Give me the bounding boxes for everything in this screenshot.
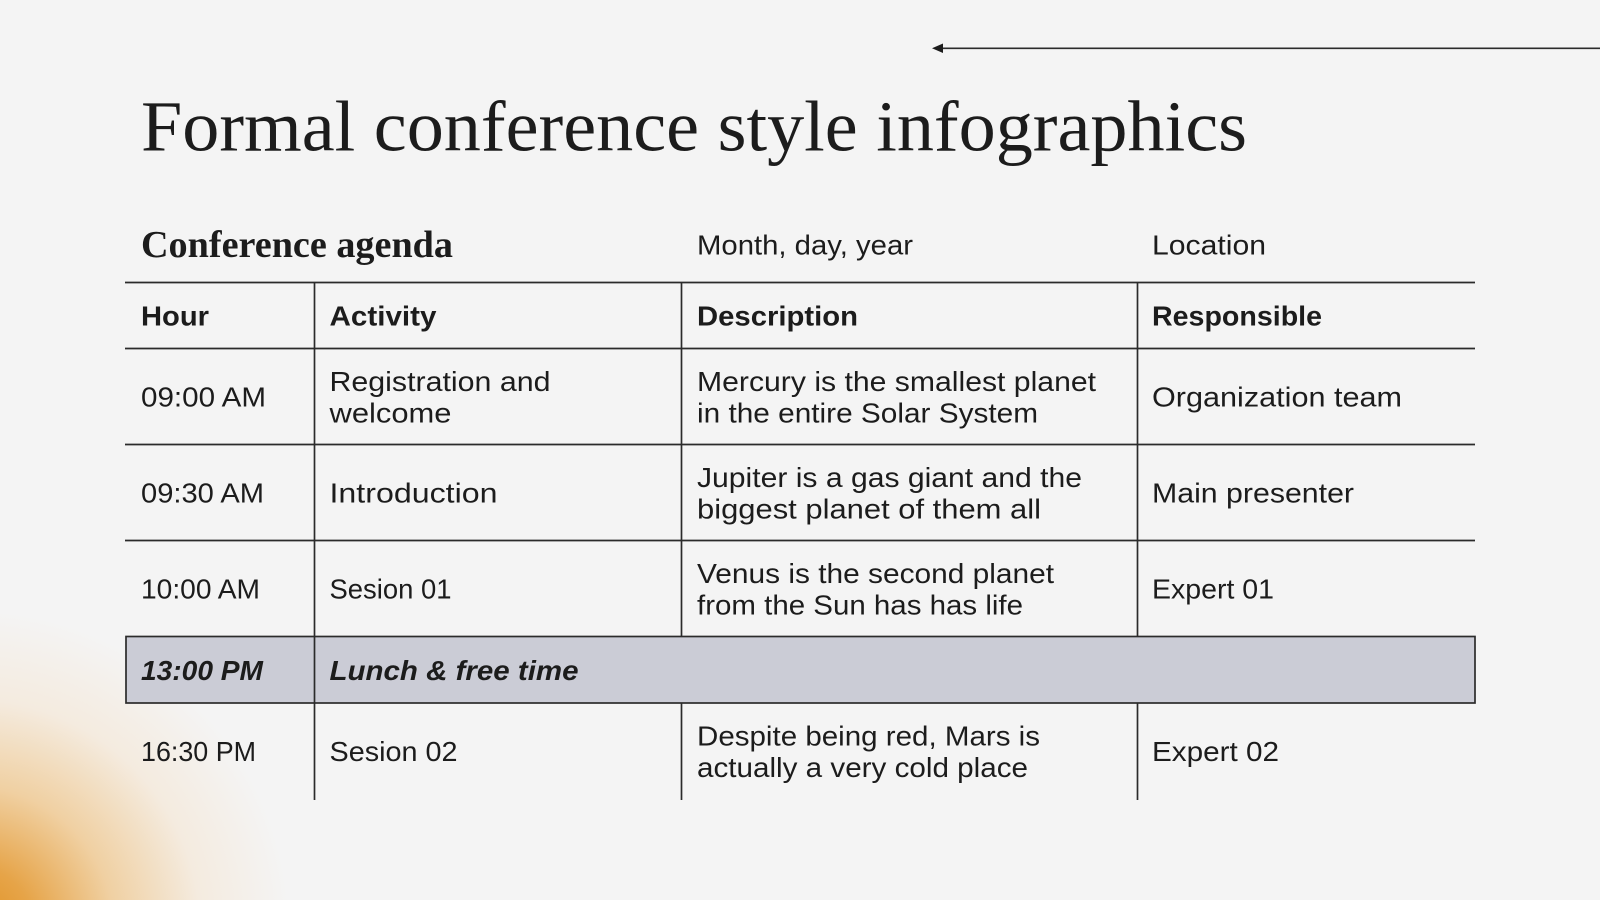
table header row: Responsible [1152, 300, 1322, 332]
row: 16:30 PM: 16:30 PM [141, 736, 256, 767]
lunch highlight band [126, 636, 1475, 703]
row: 09:00 AM: Organization team [1152, 382, 1402, 412]
row: 09:30 AM: Jupiter is a gas giant and the [697, 462, 1082, 493]
table header row: Hour [141, 300, 209, 332]
table heading row [141, 224, 1266, 266]
row: 09:00 AM: 09:00 AM [141, 382, 266, 412]
table header row: Activity [330, 300, 437, 332]
arrow [932, 44, 1600, 53]
row: 09:00 AM: Registration and [330, 366, 550, 397]
row: 10:00 AM: from the Sun has has life [697, 590, 1023, 620]
row: 09:00 AM: welcome [328, 398, 452, 428]
heading: conference agenda: Conference agenda [141, 224, 453, 266]
row: 09:30 AM: 09:30 AM [141, 478, 264, 508]
row: 09:00 AM [141, 366, 1402, 428]
row: 10:00 AM: 10:00 AM [141, 574, 260, 604]
row: 09:30 AM [141, 462, 1354, 524]
date label: Month, day, year [697, 230, 913, 260]
row: 09:00 AM: in the entire Solar System [697, 398, 1038, 428]
row: 09:30 AM: Introduction [330, 478, 498, 508]
row: 13:00 PM lunch [141, 655, 578, 686]
table header row [141, 300, 1322, 332]
table header row: Description [697, 300, 858, 332]
row: 10:00 AM: Expert 01 [1152, 574, 1274, 604]
agenda table [125, 282, 1475, 800]
row: 16:30 PM: Sesion 02 [330, 736, 458, 767]
title: Formal conference style infographics [141, 86, 1247, 166]
row: 13:00 PM lunch: 13:00 PM [141, 655, 264, 686]
row: 09:30 AM: biggest planet of them all [697, 494, 1041, 524]
row: 09:30 AM: Main presenter [1152, 478, 1354, 508]
row: 13:00 PM lunch: Lunch & free time [330, 655, 578, 686]
row: 10:00 AM: Sesion 01 [330, 574, 452, 604]
location label: Location [1152, 230, 1266, 260]
row: 10:00 AM: Venus is the second planet [697, 558, 1054, 589]
row: 16:30 PM: Despite being red, Mars is [697, 720, 1040, 752]
row: 16:30 PM [141, 720, 1279, 783]
row: 16:30 PM: actually a very cold place [697, 752, 1028, 783]
row: 10:00 AM [141, 558, 1274, 620]
row: 16:30 PM: Expert 02 [1152, 736, 1279, 767]
row: 09:00 AM: Mercury is the smallest planet [697, 366, 1096, 397]
background gradient glow [0, 580, 360, 900]
